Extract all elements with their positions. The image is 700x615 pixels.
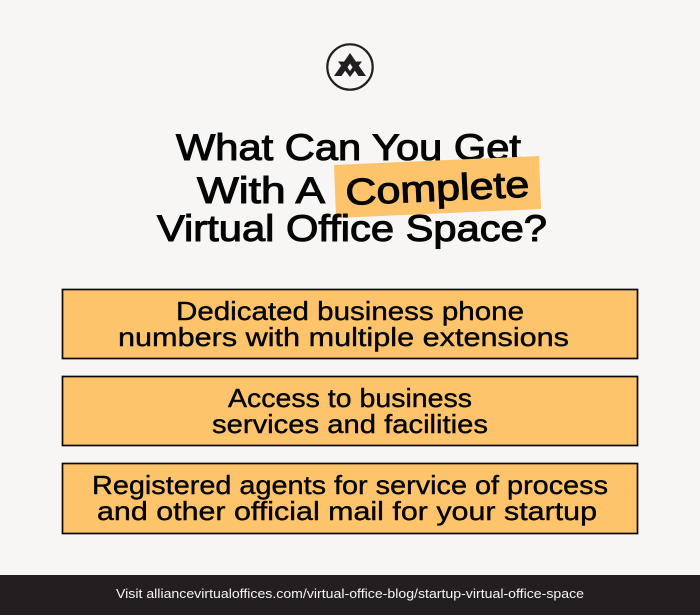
title: What Can You Get — [176, 127, 522, 168]
panel: business services: Access to business — [228, 383, 472, 413]
panel: registered agents: and other official mail for your startup — [97, 496, 597, 526]
title: Virtual Office Space? — [157, 208, 547, 249]
title highlight: Complete — [334, 156, 541, 218]
panel: business services — [62, 376, 638, 446]
panel: phone numbers: Dedicated business phone — [176, 296, 524, 326]
panel: registered agents — [62, 464, 638, 534]
panel: registered agents: Registered agents for service of process — [92, 470, 608, 500]
title: With A — [197, 170, 325, 211]
panel: business services: services and facilities — [212, 409, 488, 439]
title highlight: Complete: Complete — [345, 164, 530, 213]
icon: logo — [327, 44, 373, 90]
panel: phone numbers: numbers with multiple extensions — [118, 322, 569, 352]
footer: Visit alliancevirtualoffices.com/virtual-office-blog/startup-virtual-office-space — [116, 587, 584, 601]
title — [157, 127, 547, 249]
footer — [0, 575, 700, 615]
panel: phone numbers — [62, 290, 638, 358]
